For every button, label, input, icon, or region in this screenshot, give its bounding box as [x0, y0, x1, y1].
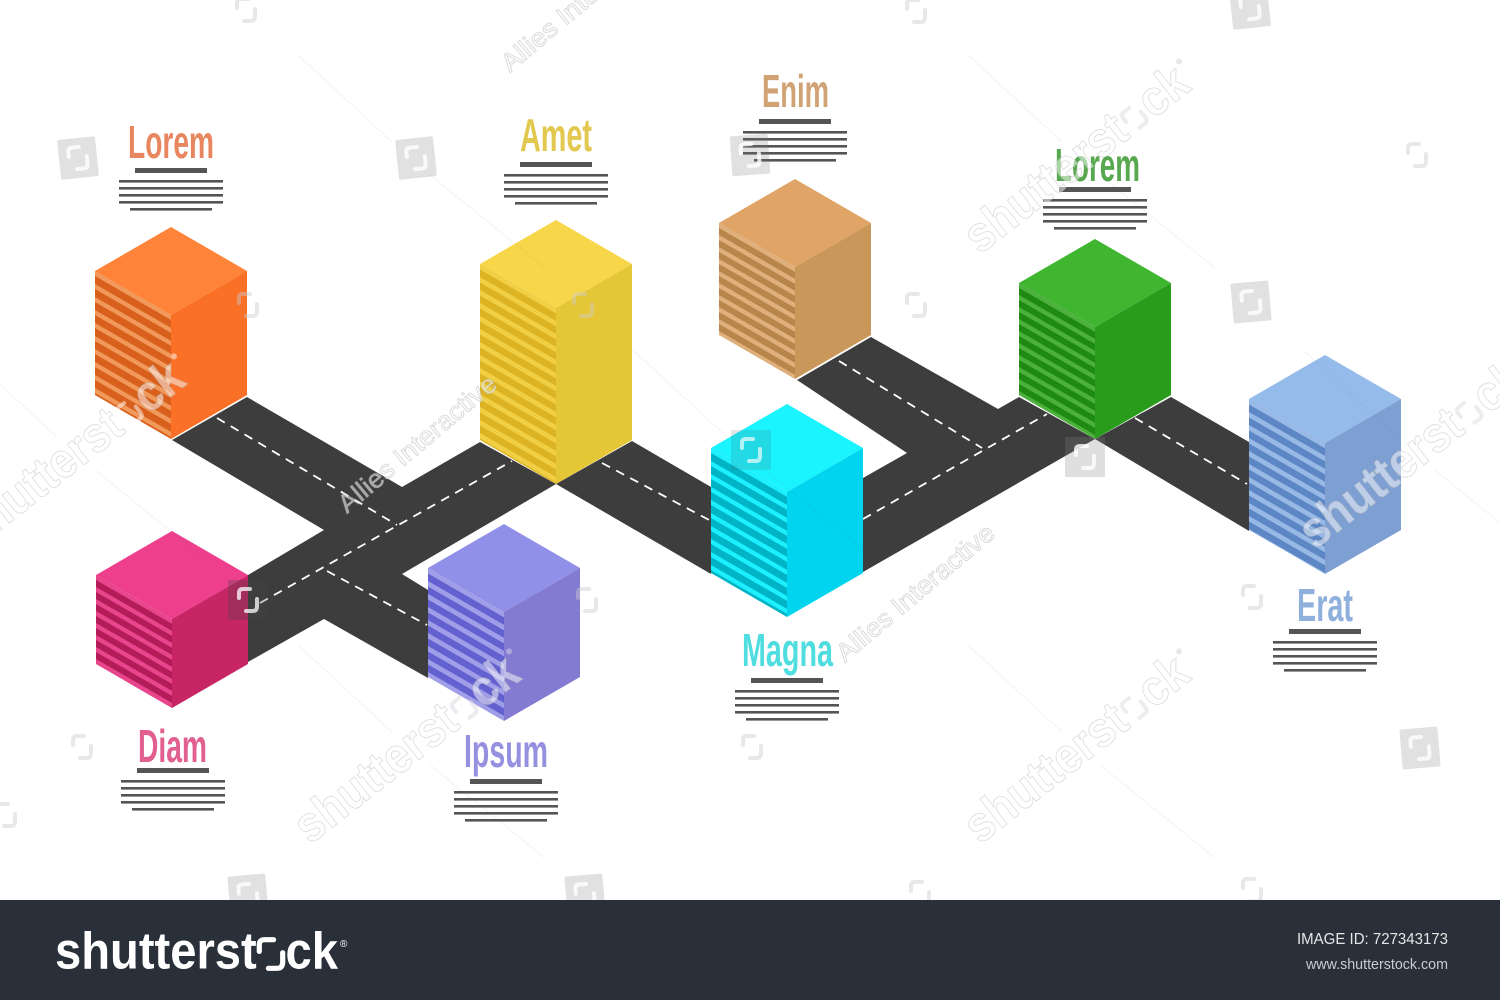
label: Ipsum: Ipsum: [464, 725, 548, 777]
label: Magna: [735, 624, 839, 721]
watermarks: Allies Interactive: [332, 368, 503, 519]
label: Ipsum: [454, 725, 558, 822]
footer url: www.shutterstock.com: [1305, 957, 1448, 973]
label: Lorem orange: [119, 116, 223, 211]
building: pink: [96, 531, 248, 708]
footer image id: IMAGE ID: 727343173: [1297, 931, 1448, 948]
road: pink to yellow: [248, 442, 556, 662]
label: Amet: [504, 109, 608, 205]
lane markings: [217, 361, 1247, 625]
building: cyan: [711, 404, 863, 617]
label: Lorem green: Lorem: [1055, 139, 1140, 191]
label: Erat: Erat: [1297, 579, 1353, 631]
watermarks: shutterstock: [282, 643, 530, 854]
building: tan: [719, 179, 871, 379]
watermarks: Allies Interactive: [830, 517, 1001, 668]
footer bar: [0, 900, 1500, 1000]
footer logo: shutterstock: [55, 922, 338, 980]
road: cyan to green: [863, 397, 1095, 572]
building: purple: [428, 524, 580, 721]
label: Diam: [121, 720, 225, 811]
label: Diam: Diam: [138, 720, 207, 772]
label: Amet: Amet: [520, 109, 592, 161]
label: Enim: Enim: [762, 65, 829, 117]
label: Erat: [1273, 579, 1377, 672]
road: orange to purple: [172, 397, 428, 678]
watermarks: shutterstock: [952, 53, 1200, 264]
label: Lorem green: [1043, 139, 1147, 230]
label: Magna: Magna: [742, 624, 833, 676]
building: blue: [1249, 355, 1401, 574]
building: green: [1019, 239, 1171, 439]
building: yellow: [480, 220, 632, 484]
building: orange: [95, 227, 247, 439]
road: tan branch: [797, 337, 1000, 453]
footer logo: ®: [340, 939, 348, 950]
label: Lorem orange: Lorem: [128, 116, 214, 168]
road: green to blue: [1095, 397, 1249, 531]
watermarks: shutterstock: [952, 643, 1200, 854]
label: Enim: [743, 65, 847, 162]
road: yellow to cyan: [556, 441, 711, 574]
road network: [172, 337, 1249, 678]
